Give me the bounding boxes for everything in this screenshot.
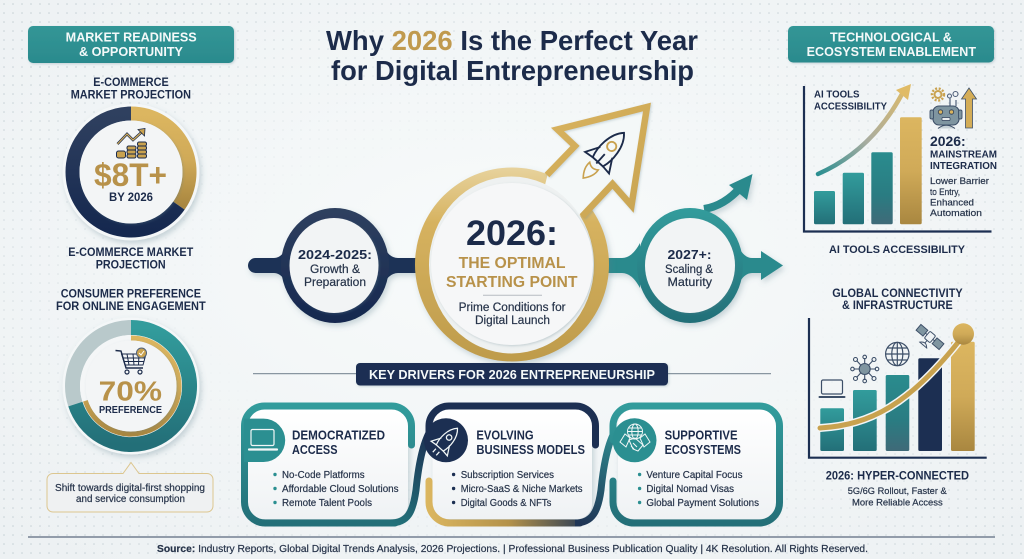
list: evolving business models: Subscription Services: [461, 470, 554, 481]
bar chart: AI tools accessibility: AI TOOLS: [814, 89, 860, 100]
stage: 2024-2025: [248, 208, 418, 323]
panel: timeline: [248, 107, 783, 362]
icon: laptop: [820, 380, 844, 397]
list: democratized access: Affordable Cloud Solutions: [282, 484, 399, 495]
bar chart: AI tools accessibility: ACCESSIBILITY: [814, 101, 887, 112]
text: 2026 mainstream integration: MAINSTREAM: [930, 150, 997, 160]
donut chart: $8T+ by 2026: $8T+: [94, 157, 167, 193]
text: 2026 mainstream integration: Lower Barrier: [930, 176, 989, 187]
stage: 2024-2025: 2024-2025:: [298, 247, 372, 262]
card: evolving business models: [424, 406, 617, 523]
bar chart: AI tools accessibility: [804, 84, 992, 232]
text: 2026 mainstream integration: [930, 134, 997, 219]
e-commerce caption: PROJECTION: [96, 260, 166, 272]
title: [326, 25, 698, 86]
card: supportive ecosystems: ECOSYSTEMS: [665, 442, 741, 457]
consumer preference heading: CONSUMER PREFERENCE: [61, 288, 201, 300]
text: 2026 hyper-connected: 2026: HYPER-CONNECTED: [826, 470, 969, 482]
stage: 2026 central circle and arrow: THE OPTIMAL: [459, 255, 566, 272]
stage: 2024-2025: Growth &: [310, 264, 360, 276]
list: democratized access: Remote Talent Pools: [282, 498, 372, 509]
stage: 2026 central circle and arrow: STARTING POINT: [446, 274, 578, 291]
card: evolving business models: BUSINESS MODELS: [476, 442, 585, 457]
text: 2026 mainstream integration: Automation: [930, 208, 982, 219]
AI tools caption: AI TOOLS ACCESSIBILITY: [829, 244, 966, 256]
list: evolving business models: Digital Goods & NFTs: [461, 498, 551, 509]
stage: 2026 central circle and arrow: 2026:: [466, 214, 558, 253]
card: democratized access: ACCESS: [292, 442, 338, 457]
key drivers banner: [253, 363, 771, 386]
card: evolving business models: EVOLVING: [476, 428, 534, 443]
footer source line: Source: Industry Reports, Global Digital Trends Analysis, 2026 Projections. | Professional Business Publication Quality | 4K Resolution. All Rights Reserved.: [157, 544, 868, 555]
icon: coins and growth arrow: [116, 128, 146, 158]
key drivers banner: KEY DRIVERS FOR 2026 ENTREPRENEURSHIP: [369, 367, 655, 382]
connectivity heading: & INFRASTRUCTURE: [842, 300, 953, 312]
text: 2026 mainstream integration: to Entry,: [930, 187, 960, 198]
icon: satellite: [912, 324, 944, 355]
callout: and service consumption: [76, 494, 185, 505]
stage: 2027+: Maturity: [668, 277, 712, 289]
panel: key drivers: [244, 363, 780, 523]
consumer preference heading: FOR ONLINE ENGAGEMENT: [56, 301, 206, 313]
stage: 2024-2025: Preparation: [304, 277, 366, 289]
curve: connectivity growth: [820, 323, 974, 428]
arrow: AI growth: [818, 84, 911, 174]
list: democratized access: No-Code Platforms: [282, 470, 365, 481]
list: supportive ecosystems: Digital Nomad Visas: [646, 484, 734, 495]
callout: Shift towards digital-first shopping: [55, 483, 205, 494]
stage: 2026 central circle and arrow: Digital Launch: [475, 315, 550, 327]
card: supportive ecosystems: [612, 406, 780, 523]
connectivity heading: [832, 288, 963, 312]
callout: [47, 462, 213, 512]
title: Why 2026 Is the Perfect Year: [326, 25, 698, 56]
right section heading: TECHNOLOGICAL &: [830, 31, 952, 45]
consumer preference heading: [56, 288, 206, 313]
stage: 2027+: 2027+:: [668, 247, 712, 262]
list: supportive ecosystems: [638, 470, 759, 509]
arrow: upward growth arrow: [540, 107, 647, 216]
card: supportive ecosystems: SUPPORTIVE: [665, 428, 738, 443]
text: 2026 hyper-connected: 5G/6G Rollout, Faster &: [848, 486, 947, 497]
stage: 2026 central circle and arrow: [415, 107, 647, 362]
text: 2026 mainstream integration: INTEGRATION: [930, 161, 997, 172]
panel: market readiness and opportunity: [28, 26, 234, 512]
stage: 2027+: [605, 174, 783, 323]
card: democratized access: [244, 406, 432, 523]
icon: rocket badge: [424, 418, 468, 462]
connectivity heading: GLOBAL CONNECTIVITY: [832, 288, 963, 300]
left section heading: MARKET READINESS: [66, 30, 197, 44]
list: evolving business models: Micro-SaaS & Niche Markets: [461, 484, 582, 495]
icon: shopping cart: [116, 348, 146, 374]
panel: technological and ecosystem enablement: [788, 26, 997, 509]
donut chart: 70% preference: PREFERENCE: [99, 404, 162, 416]
donut chart: 70% preference: 70%: [99, 376, 162, 407]
bar chart: global connectivity: [809, 318, 987, 458]
icon: network: [851, 355, 879, 383]
list: democratized access: [273, 470, 399, 509]
icon: globe and handshake: [612, 418, 656, 462]
text: 2026 mainstream integration: Enhanced: [930, 198, 974, 209]
donut chart: $8T+ by 2026: [62, 104, 200, 240]
e-commerce heading: E-COMMERCE: [93, 77, 169, 89]
e-commerce caption: E-COMMERCE MARKET: [68, 247, 193, 259]
card: democratized access: DEMOCRATIZED: [292, 428, 385, 443]
e-commerce heading: [71, 77, 191, 102]
icon: globe: [886, 342, 909, 366]
list: supportive ecosystems: Venture Capital Focus: [646, 470, 742, 481]
stage: 2026 central circle and arrow: Prime Conditions for: [459, 302, 566, 314]
title: for Digital Entrepreneurship: [331, 55, 694, 86]
icon: robot with gear and up arrow: [930, 88, 976, 128]
text: 2026 mainstream integration: 2026:: [930, 134, 966, 149]
list: evolving business models: [452, 470, 582, 509]
right section heading: ECOSYSTEM ENABLEMENT: [807, 45, 976, 59]
left section heading: [28, 26, 234, 63]
icon: laptop: [244, 419, 285, 462]
stage: 2027+: Scaling &: [665, 264, 713, 276]
list: supportive ecosystems: Global Payment Solutions: [646, 498, 759, 509]
e-commerce caption: [68, 247, 193, 272]
e-commerce heading: MARKET PROJECTION: [71, 90, 191, 102]
icon: rocket: [571, 122, 636, 189]
left section heading: & OPPORTUNITY: [79, 45, 184, 59]
donut chart: $8T+ by 2026: BY 2026: [109, 192, 153, 204]
text: 2026 hyper-connected: [826, 470, 969, 509]
right section heading: [788, 26, 994, 62]
text: 2026 hyper-connected: More Reliable Access: [852, 498, 943, 509]
donut chart: 70% preference: [62, 318, 200, 454]
